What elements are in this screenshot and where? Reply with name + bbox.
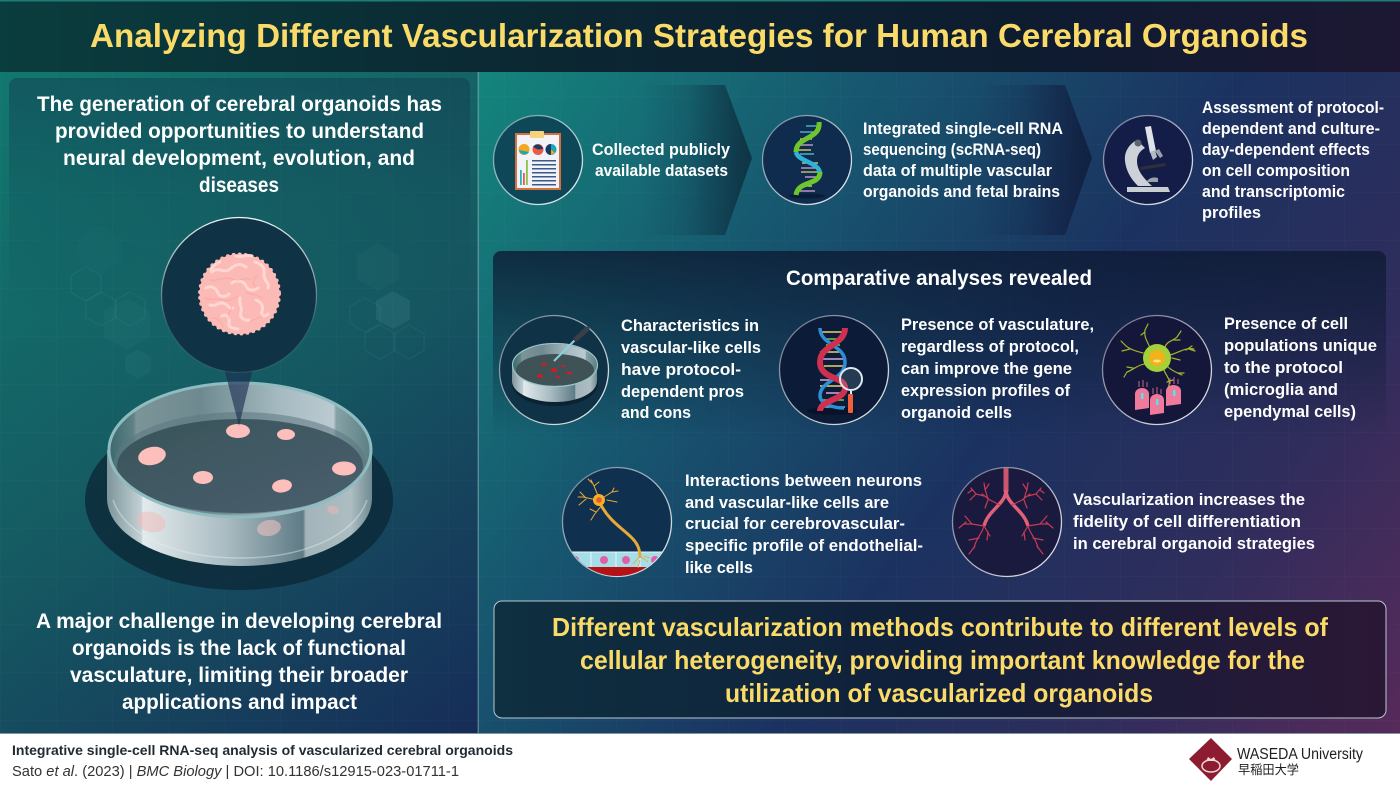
- step 2 text: [863, 119, 1063, 201]
- challenge text: applications and impact: [122, 691, 357, 714]
- decorative hexagons: [71, 225, 424, 379]
- callout: conclusion: [494, 601, 1386, 718]
- finding 4 text: and vascular-like cells are: [685, 493, 889, 512]
- finding 3 text: ependymal cells): [1224, 402, 1356, 421]
- arrow: step 2 to 3: [975, 85, 1092, 235]
- intro text: The generation of cerebral organoids has: [37, 93, 442, 116]
- finding 4 icon: neuron on endothelium: [560, 468, 680, 579]
- step 3 text: and transcriptomic: [1202, 182, 1345, 201]
- intro text: provided opportunities to understand: [55, 120, 424, 143]
- footer: [0, 733, 1400, 788]
- challenge text: organoids is the lack of functional: [72, 637, 406, 660]
- arrow: step 1 to 2: [640, 85, 752, 235]
- step 1 icon: clipboard with charts: [494, 116, 582, 204]
- logo: Waseda University: 早稲田大学: [1238, 762, 1299, 777]
- finding 1 text: and cons: [621, 403, 691, 422]
- finding 5 text: in cerebral organoid strategies: [1073, 534, 1315, 553]
- step 3 text: Assessment of protocol-: [1202, 98, 1384, 117]
- step 3 text: day-dependent effects: [1202, 140, 1370, 159]
- finding 2 text: Presence of vasculature,: [901, 315, 1094, 334]
- intro text: neural development, evolution, and: [63, 147, 415, 170]
- icon: brain-like organoid: [200, 254, 280, 334]
- finding 3 text: (microglia and: [1224, 380, 1338, 399]
- challenge text: A major challenge in developing cerebral: [36, 610, 442, 633]
- challenge text: vasculature, limiting their broader: [70, 664, 408, 687]
- finding 3 text: populations unique: [1224, 336, 1377, 355]
- finding 2 text: [901, 315, 1094, 422]
- callout: magnified organoid: [162, 218, 316, 426]
- finding 1 text: dependent pros: [621, 382, 744, 401]
- finding 5 icon: vascular tree: [952, 468, 1062, 576]
- illustration: petri dish with organoids: [85, 383, 393, 590]
- finding 1 text: Characteristics in: [621, 316, 759, 335]
- heading: Comparative analyses revealed: [786, 267, 1092, 290]
- logo: Waseda University: [1189, 738, 1363, 781]
- title bar: [0, 0, 1400, 72]
- panel: left column: [9, 78, 470, 714]
- panel: workflow steps: [494, 85, 1384, 235]
- finding 4 text: Interactions between neurons: [685, 471, 922, 490]
- step 3 text: dependent and culture-: [1202, 119, 1380, 138]
- finding 5 text: fidelity of cell differentiation: [1073, 512, 1301, 531]
- intro text: [37, 93, 442, 197]
- finding 2 text: can improve the gene: [901, 359, 1072, 378]
- panel: comparative analyses: [493, 251, 1386, 591]
- organoid spheres in dish: [136, 424, 356, 494]
- step 2 text: organoids and fetal brains: [863, 182, 1060, 201]
- finding 4 text: specific profile of endothelial-: [685, 536, 923, 555]
- logo: Waseda University: WASEDA University: [1237, 746, 1363, 763]
- step 1 text: [592, 140, 731, 180]
- step 1 text: available datasets: [595, 161, 728, 180]
- finding 2 text: regardless of protocol,: [901, 337, 1079, 356]
- step 3 icon: microscope: [1104, 116, 1192, 204]
- ependymal cells: [1135, 385, 1181, 415]
- title: Analyzing Different Vascularization Strategies for Human Cerebral Organoids: [90, 17, 1308, 54]
- callout: conclusion: cellular heterogeneity, providing important knowledge for the: [580, 645, 1305, 675]
- finding 1 text: have protocol-: [621, 360, 741, 379]
- step 3 text: on cell composition: [1202, 161, 1350, 180]
- step 2 text: Integrated single-cell RNA: [863, 119, 1063, 138]
- finding 2 text: organoid cells: [901, 403, 1012, 422]
- finding 2 icon: DNA with magnifier: [780, 316, 888, 424]
- intro text: diseases: [199, 174, 279, 197]
- challenge text: [36, 610, 442, 714]
- step 3 text: profiles: [1202, 203, 1261, 222]
- citation: [12, 742, 513, 780]
- finding 1 icon: petri dish with pipette: [500, 316, 608, 424]
- finding 2 text: expression profiles of: [901, 381, 1070, 400]
- step 1 text: Collected publicly: [592, 140, 731, 159]
- finding 3 text: [1224, 314, 1377, 421]
- finding 3 icon: microglia and ependymal cells: [1102, 316, 1212, 424]
- finding 4 text: crucial for cerebrovascular-: [685, 514, 905, 533]
- step 2 icon: DNA helix: [762, 116, 852, 204]
- finding 4 text: like cells: [685, 558, 753, 577]
- citation: Integrative single-cell RNA-seq analysis of vascularized cerebral organoids: [12, 742, 513, 758]
- finding 5 text: [1073, 490, 1315, 553]
- finding 1 text: [621, 316, 761, 422]
- finding 3 text: Presence of cell: [1224, 314, 1348, 333]
- callout: conclusion: utilization of vascularized organoids: [725, 678, 1153, 708]
- finding 3 text: to the protocol: [1224, 358, 1343, 377]
- citation: Sato et al. (2023) | BMC Biology | DOI: 10.1186/s12915-023-01711-1: [12, 764, 459, 780]
- finding 5 text: Vascularization increases the: [1073, 490, 1305, 509]
- callout: conclusion: Different vascularization methods contribute to different levels of: [552, 612, 1328, 642]
- step 3 text: [1202, 98, 1384, 222]
- finding 4 text: [685, 471, 923, 577]
- step 2 text: sequencing (scRNA-seq): [863, 140, 1041, 159]
- finding 1 text: vascular-like cells: [621, 338, 761, 357]
- step 2 text: data of multiple vascular: [863, 161, 1052, 180]
